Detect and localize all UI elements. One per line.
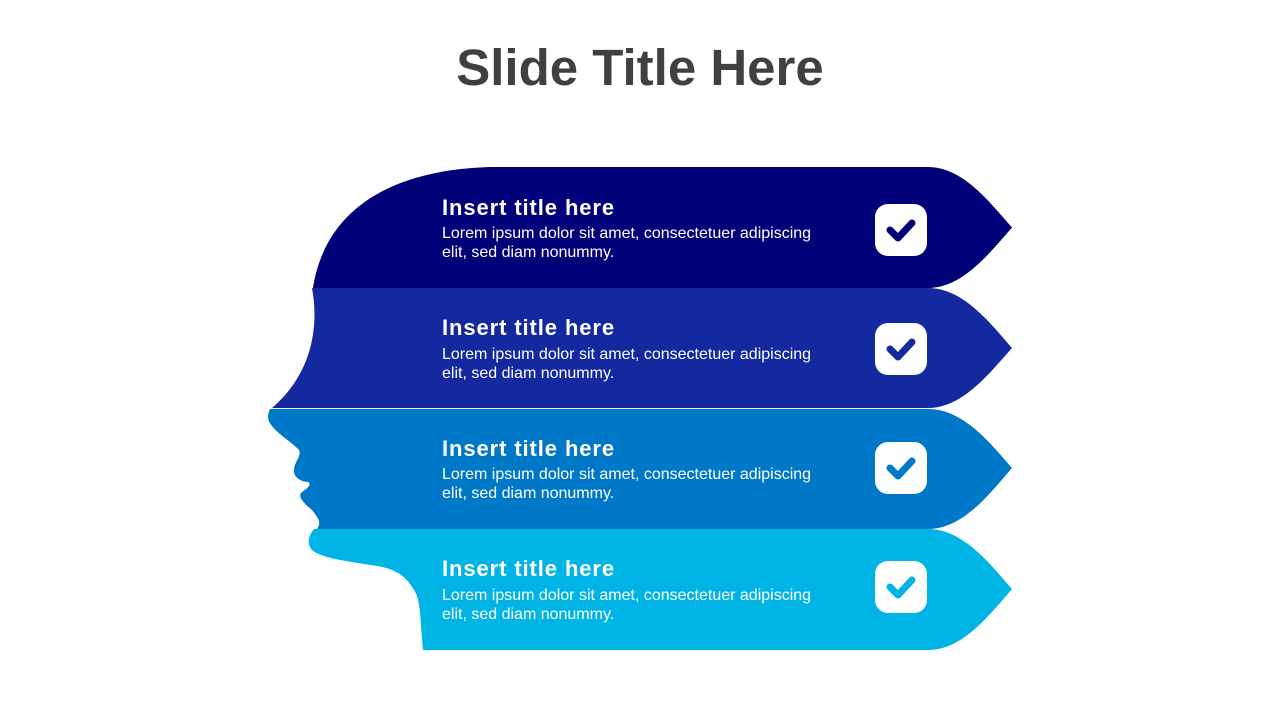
- text 4: elit, sed diam nonummy.: [442, 606, 614, 623]
- text 1: elit, sed diam nonummy.: [442, 244, 614, 261]
- band 3: [268, 409, 1012, 529]
- text 1: Lorem ipsum dolor sit amet, consectetuer adipiscing: [442, 225, 811, 242]
- band 1: [313, 167, 1012, 288]
- text 1: [442, 195, 811, 261]
- band 4: [309, 529, 1012, 650]
- icon: check 4: [875, 561, 927, 613]
- text 4: Insert title here: [442, 556, 615, 581]
- text 1: Insert title here: [442, 195, 615, 220]
- text 4: [442, 556, 811, 623]
- text 3: Insert title here: [442, 436, 615, 461]
- text 3: elit, sed diam nonummy.: [442, 485, 614, 502]
- text 2: Insert title here: [442, 315, 615, 340]
- icon: check 3: [875, 442, 927, 494]
- text 2: elit, sed diam nonummy.: [442, 365, 614, 382]
- text 3: [442, 436, 811, 502]
- title: Slide Title Here: [456, 39, 824, 96]
- icon: check 1: [875, 204, 927, 256]
- text 3: Lorem ipsum dolor sit amet, consectetuer adipiscing: [442, 466, 811, 483]
- icon: check 2: [875, 323, 927, 375]
- text 4: Lorem ipsum dolor sit amet, consectetuer adipiscing: [442, 587, 811, 604]
- text 2: Lorem ipsum dolor sit amet, consectetuer adipiscing: [442, 346, 811, 363]
- band 2: [272, 288, 1012, 408]
- text 2: [442, 315, 811, 382]
